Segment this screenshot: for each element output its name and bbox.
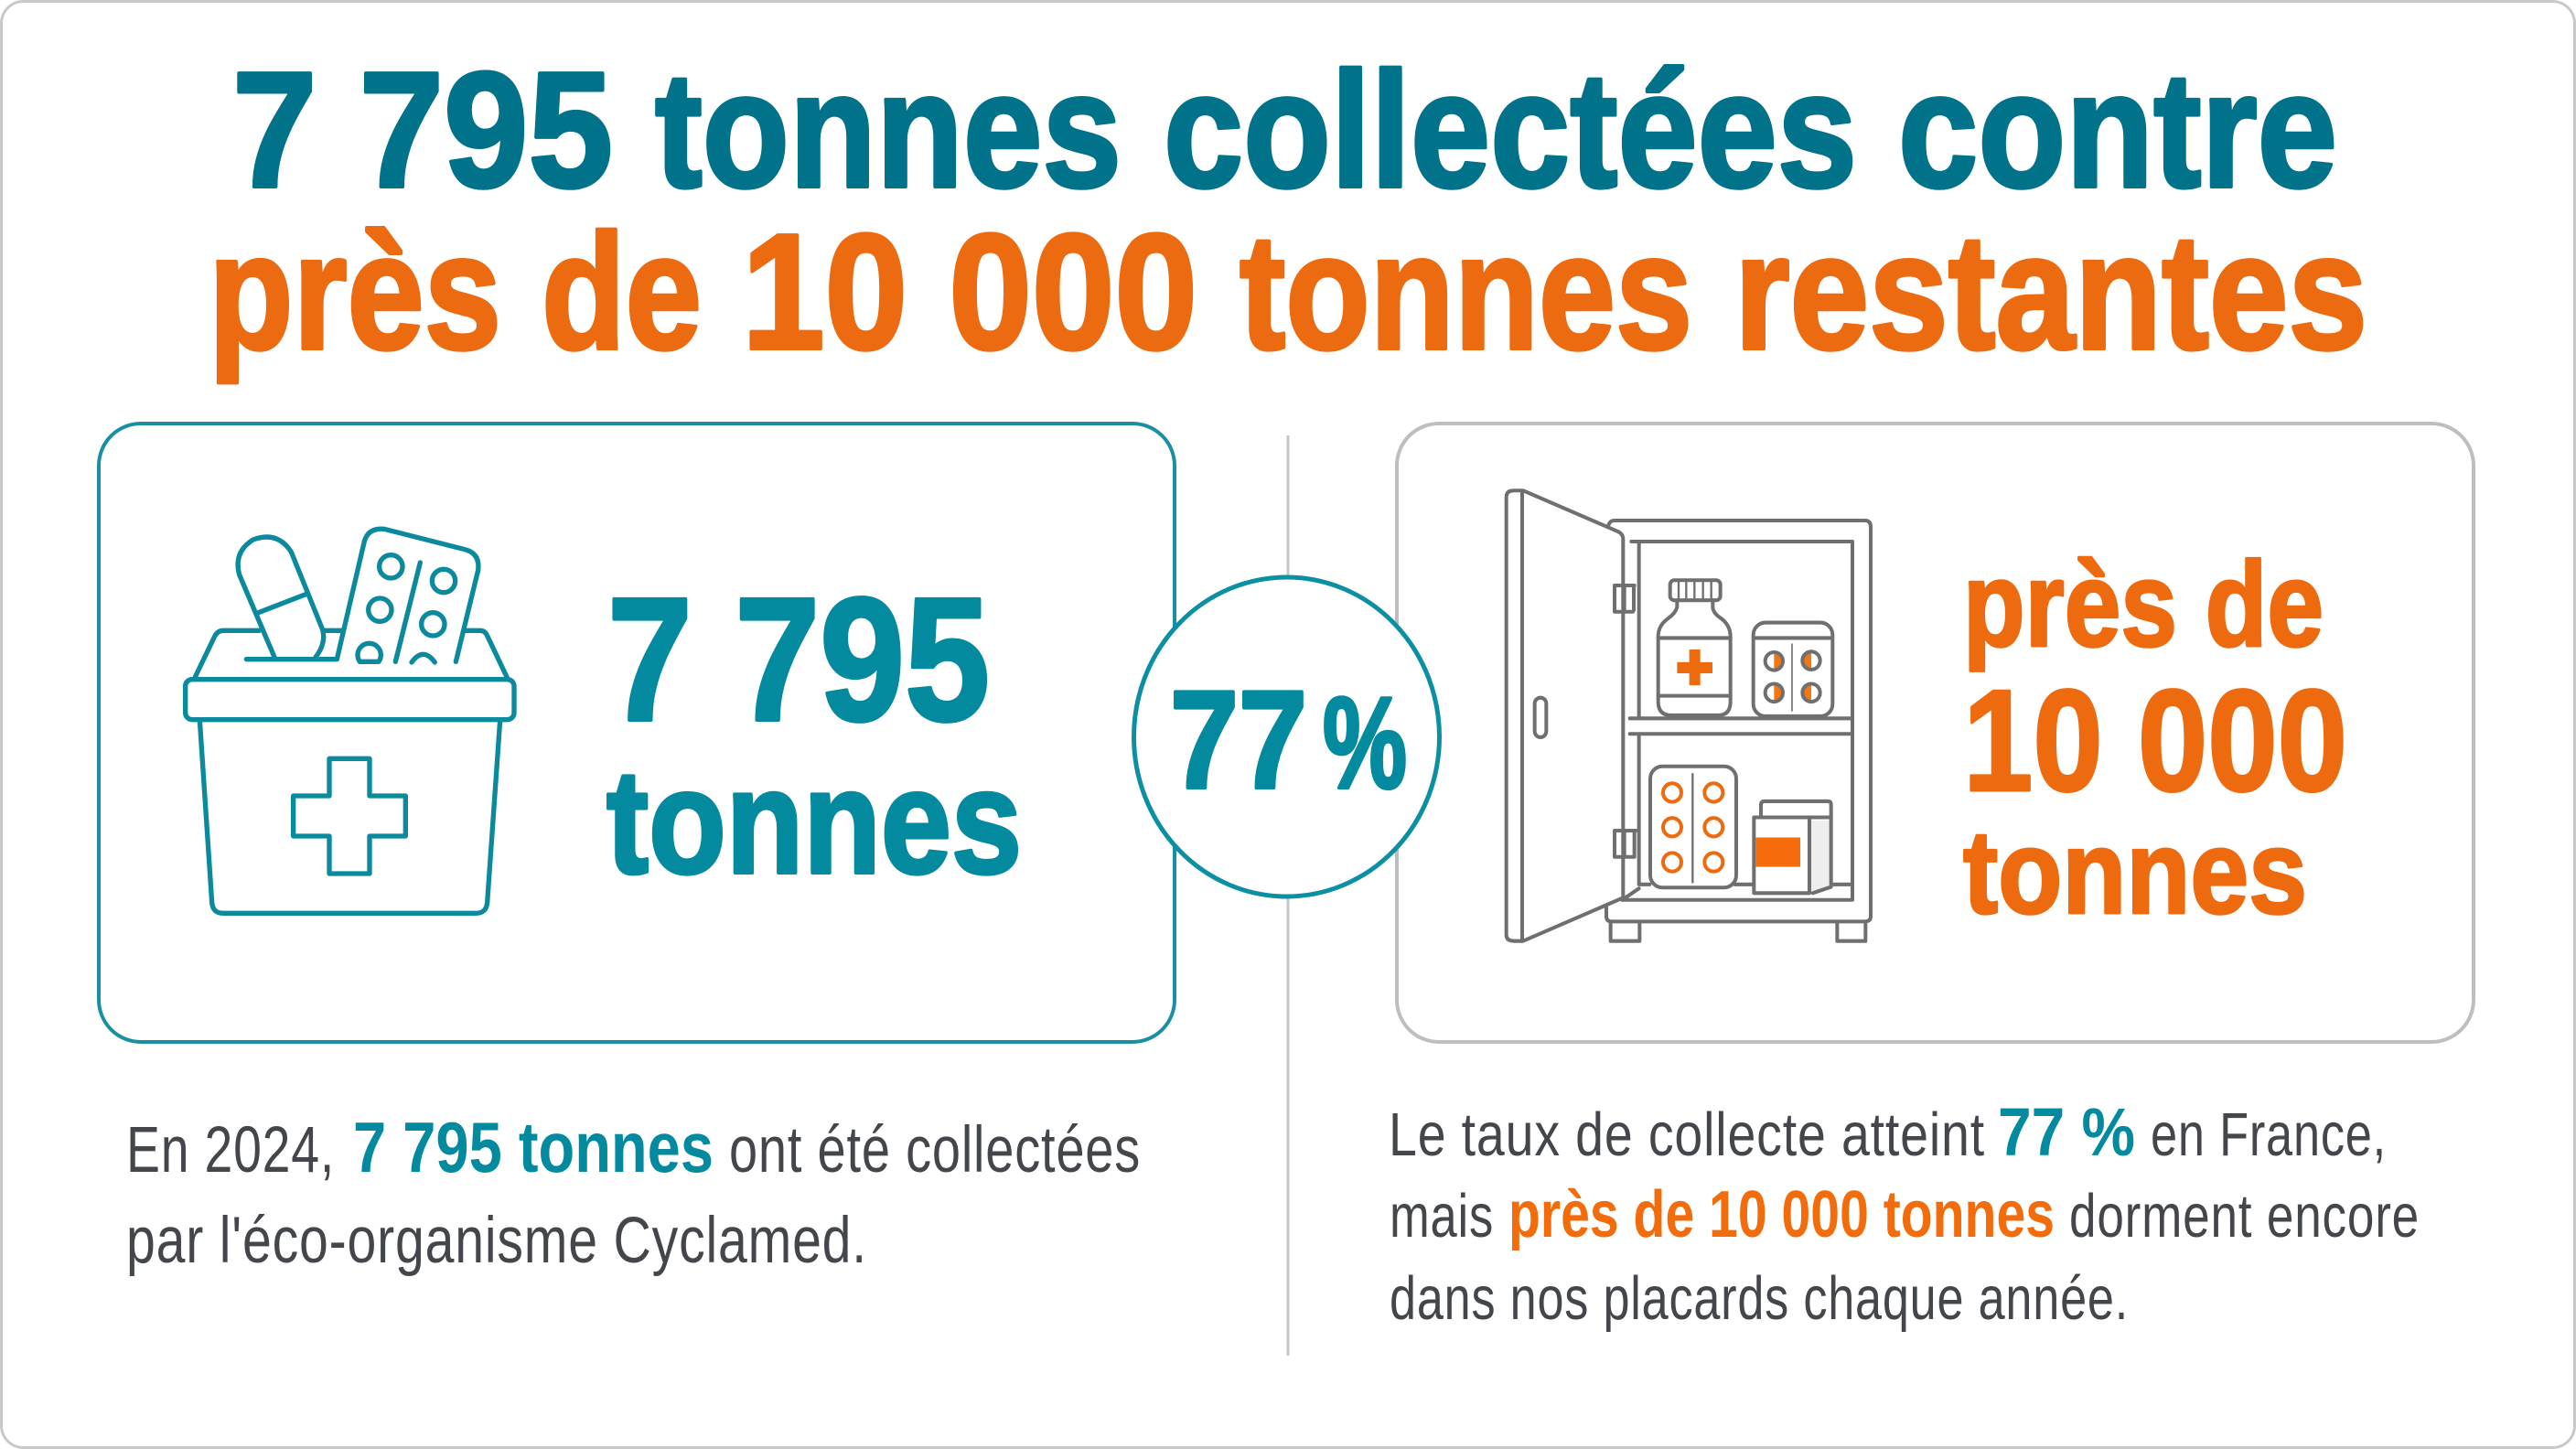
- stat: 7 795 tonnes: 7 795: [607, 561, 990, 757]
- text block: remaining: dans nos placards chaque année.: [1390, 1264, 2129, 1333]
- title line 2: de: [542, 200, 702, 384]
- title line 1: 7 795: [232, 38, 613, 222]
- stat: près de 10 000 tonnes: [1963, 537, 2347, 939]
- text block: collected: par l'éco-organisme Cyclamed.: [126, 1205, 867, 1277]
- text block: collected: ont été collectées: [729, 1114, 1141, 1186]
- stat: 7 795 tonnes: [606, 561, 1022, 905]
- icon: medicine cabinet: [1507, 490, 1871, 941]
- text block: collected: [126, 1107, 1141, 1277]
- badge: 77 %: [1134, 577, 1440, 896]
- badge: 77 %: %: [1323, 671, 1407, 816]
- title line 1: tonnes: [655, 38, 1122, 222]
- title line 1: contre: [1898, 38, 2337, 222]
- pill jar: [1754, 623, 1832, 716]
- panel: remaining: [1397, 424, 2474, 1042]
- bottle: [1658, 580, 1731, 715]
- stat: près de 10 000 tonnes: 10 000: [1963, 660, 2347, 821]
- title line 2: près: [209, 200, 501, 384]
- title: [209, 38, 2367, 384]
- text block: remaining: Le taux de collecte atteint: [1389, 1100, 1985, 1169]
- stat: près de 10 000 tonnes: près de: [1963, 537, 2324, 671]
- title line 2: 10 000: [742, 200, 1197, 384]
- text block: remaining: 77 %: [1998, 1094, 2135, 1170]
- text block: collected: 7 795 tonnes: [353, 1107, 714, 1187]
- panel frame: collected: [99, 424, 1175, 1042]
- panel frame: remaining: [1397, 424, 2474, 1042]
- text block: remaining: en France,: [2151, 1100, 2387, 1169]
- stat: près de 10 000 tonnes: tonnes: [1963, 805, 2307, 939]
- panel: collected: [99, 424, 1175, 1042]
- text block: remaining: [1389, 1094, 2420, 1333]
- text block: remaining: près de 10 000 tonnes: [1508, 1178, 2055, 1251]
- badge: 77 %: 77: [1170, 662, 1307, 818]
- text block: collected: En 2024,: [126, 1114, 335, 1186]
- text block: remaining: mais: [1390, 1182, 1494, 1250]
- title line 1: [232, 38, 2337, 222]
- medicine box: [1754, 801, 1831, 893]
- title line 2: restantes: [1734, 200, 2367, 384]
- title line 2: [209, 200, 2367, 384]
- text block: remaining: dorment encore: [2069, 1182, 2420, 1250]
- title line 2: tonnes: [1240, 200, 1692, 384]
- title line 1: collectées: [1164, 38, 1857, 222]
- stat: 7 795 tonnes: tonnes: [606, 739, 1022, 905]
- vertical divider: [1286, 435, 1290, 1356]
- blister pack: [1650, 767, 1736, 887]
- icon: collection box with pills: [186, 529, 514, 913]
